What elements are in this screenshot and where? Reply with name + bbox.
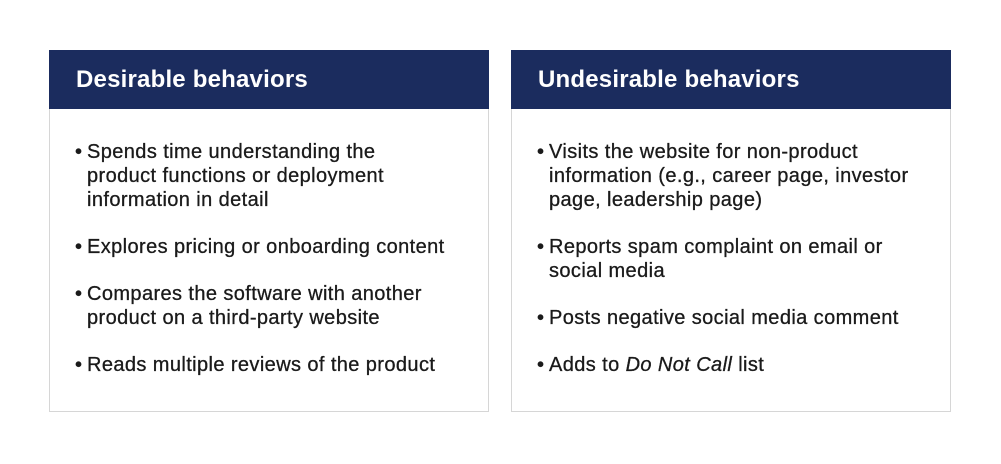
item 2: [537, 235, 883, 283]
heading: desirable: [49, 50, 489, 109]
item 2: Explores pricing or onboarding content: [87, 236, 445, 258]
panel: undesirable: [511, 50, 951, 412]
item 2: social media: [549, 260, 665, 282]
item 2: Reports spam complaint on email or: [549, 236, 883, 258]
item 1: [537, 140, 909, 212]
item 1: information (e.g., career page, investor: [549, 165, 909, 187]
item 1: product functions or deployment: [87, 165, 384, 187]
heading: undesirable: [511, 50, 951, 109]
item 3: Posts negative social media comment: [549, 307, 899, 329]
item 3: [75, 282, 422, 330]
panel: desirable: [49, 50, 489, 412]
item 4: Reads multiple reviews of the product: [87, 354, 435, 376]
item 1: information in detail: [87, 189, 269, 211]
item 1: Spends time understanding the: [87, 141, 375, 163]
item 1: [75, 140, 384, 212]
item 1: page, leadership page): [549, 189, 762, 211]
item 3: product on a third-party website: [87, 307, 380, 329]
heading: desirable: Desirable behaviors: [76, 66, 308, 93]
item 4: Adds to Do Not Call list: [549, 354, 764, 376]
heading: undesirable: Undesirable behaviors: [538, 66, 800, 93]
item 1: Visits the website for non-product: [549, 141, 858, 163]
item 3: Compares the software with another: [87, 283, 422, 305]
